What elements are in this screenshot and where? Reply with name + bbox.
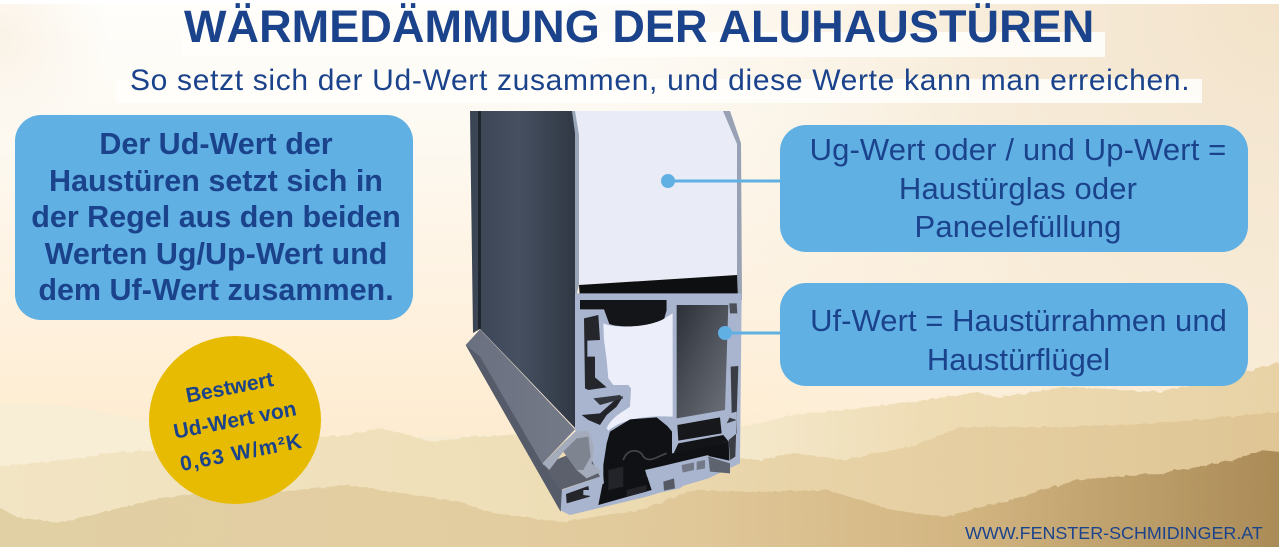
panel: Ud-Wert explanation bbox=[15, 115, 413, 320]
panel: Uf-Wert: Haustürflügel bbox=[927, 342, 1110, 377]
badge text: 0,63 W/m²K bbox=[178, 430, 304, 476]
top black seal bbox=[580, 300, 667, 326]
seal loop line bbox=[623, 451, 667, 460]
panel: Ud-Wert explanation: Haustüren setzt sich in bbox=[49, 164, 383, 198]
angled sill in 3x zoom coordinates bbox=[466, 329, 602, 512]
central white chamber bbox=[603, 313, 673, 431]
right wall recess bbox=[727, 366, 738, 460]
white panel fill bbox=[575, 111, 737, 285]
panel: Ug-Wert / Up-Wert: Ug-Wert oder / und Up-Wert = bbox=[810, 132, 1226, 167]
subtitle band highlight bbox=[116, 79, 1202, 103]
website url: WWW.FENSTER-SCHMIDINGER.AT bbox=[965, 523, 1263, 543]
weather seal bbox=[543, 431, 602, 478]
badge text: Ud-Wert von bbox=[172, 397, 298, 444]
panel: Ug-Wert / Up-Wert: Haustürglas oder bbox=[899, 170, 1137, 206]
dark outer face bbox=[470, 111, 577, 430]
panel: Ug-Wert / Up-Wert bbox=[780, 125, 1248, 252]
upper profile rail bbox=[667, 300, 730, 310]
connector line: frame bbox=[718, 326, 782, 340]
black band under panel bbox=[579, 275, 738, 300]
lower profile, drawn in 3x zoom coordinates bbox=[560, 293, 742, 515]
lower left rail chambers bbox=[560, 477, 604, 515]
right hollow chamber bbox=[677, 305, 728, 418]
badge text: Bestwert bbox=[184, 368, 275, 408]
silver panel edges bbox=[572, 111, 579, 300]
left dark chambers bbox=[584, 315, 607, 390]
panel: Uf-Wert: Uf-Wert = Haustürrahmen und bbox=[810, 303, 1227, 338]
lower chamber right bbox=[677, 417, 722, 441]
title band highlight bbox=[182, 32, 1105, 57]
panel: Ud-Wert explanation: Der Ud-Wert der bbox=[99, 127, 333, 161]
lower black mass bbox=[598, 417, 729, 505]
panel: Ud-Wert explanation: Werten Ug/Up-Wert und bbox=[45, 236, 387, 270]
connector line: panel bbox=[661, 174, 782, 188]
title: WÄRMEDÄMMUNG DER ALUHAUSTÜREN bbox=[184, 1, 1094, 52]
panel: Ud-Wert explanation: dem Uf-Wert zusammen. bbox=[38, 273, 394, 307]
lower light rail bbox=[646, 455, 710, 493]
panel: Uf-Wert bbox=[780, 283, 1248, 386]
subtitle: So setzt sich der Ud-Wert zusammen, und diese Werte kann man erreichen. bbox=[130, 64, 1190, 97]
panel: Ug-Wert / Up-Wert: Paneelefüllung bbox=[915, 209, 1121, 244]
badge: Bestwert bbox=[149, 336, 321, 504]
panel: Ud-Wert explanation: der Regel aus den beiden bbox=[31, 200, 401, 234]
badge text bbox=[172, 368, 304, 476]
light aluminium body bbox=[560, 293, 742, 515]
